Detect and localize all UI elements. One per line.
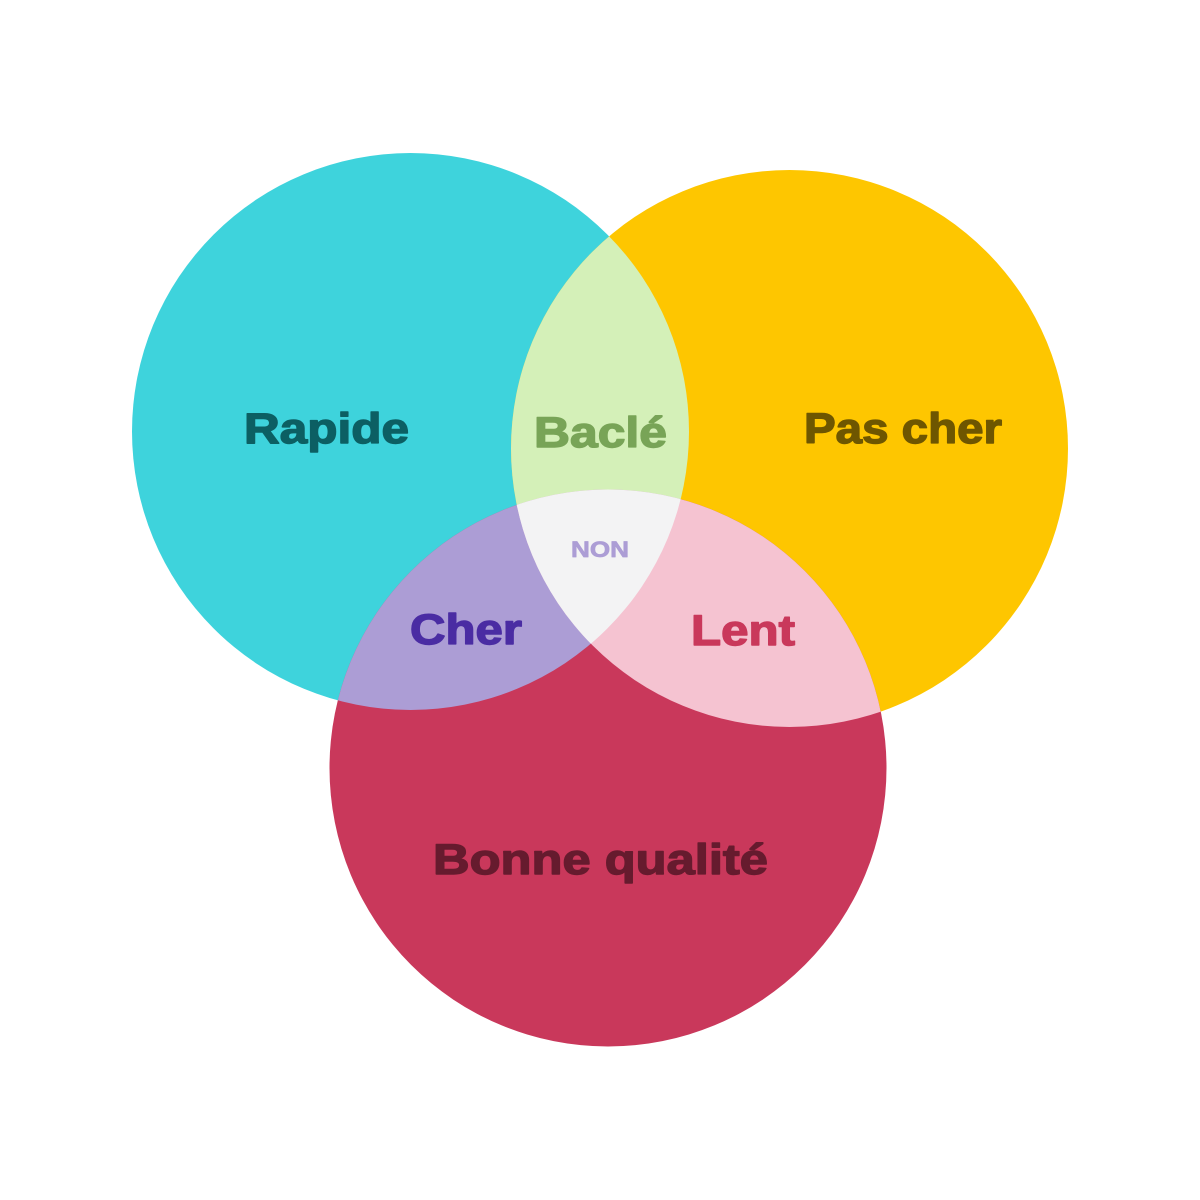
label: Pas cher: Pas cher — [804, 405, 1002, 453]
label: Rapide: Rapide — [244, 405, 409, 453]
label: NON: NON — [571, 537, 629, 562]
circle: Rapide — [132, 153, 689, 710]
overlap: Lent — [516, 490, 881, 727]
label: Lent: Lent — [691, 607, 795, 655]
circle: Bonne qualité — [330, 490, 886, 1046]
overlap: centre — [516, 490, 681, 644]
circle: Pas cher — [511, 170, 1068, 727]
label: Baclé: Baclé — [534, 409, 667, 457]
overlap: Cher — [338, 490, 680, 710]
label: Bonne qualité: Bonne qualité — [433, 836, 768, 884]
overlap: Baclé — [511, 236, 689, 505]
venn diagram — [132, 153, 1068, 1046]
label: Cher: Cher — [410, 606, 522, 654]
